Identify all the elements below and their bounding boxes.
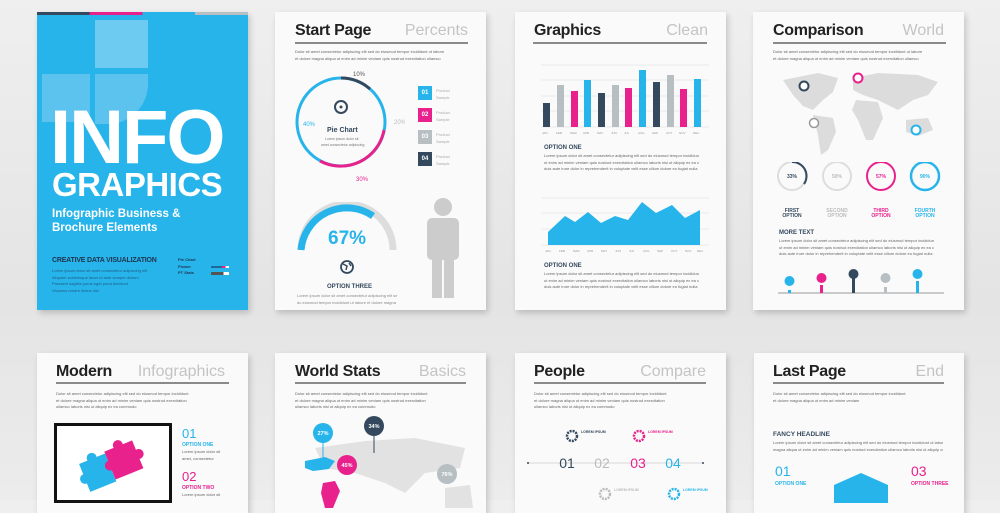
mini legend [178, 257, 196, 275]
legend: 04 [422, 156, 428, 162]
pie chart: 40% [303, 122, 316, 128]
option list: OPTION ONE [182, 442, 213, 448]
progress circles: 33% [787, 174, 798, 180]
panel: people: ullamco laboris nisi ut aliquip ex ea commodo [534, 404, 614, 409]
bar chart: DEC [693, 131, 700, 135]
option one text 2: OPTION ONE [544, 263, 582, 269]
progress circles: SECOND [826, 208, 848, 214]
panel: comparison: duis aute irure dolor in reprehenderit in voluptate velit esse cillum dolore eu fugiat nulla [779, 251, 932, 256]
progress circles: FIRST [785, 208, 799, 214]
progress circles: 90% [920, 174, 931, 180]
intro text: et dolore magna aliqua ut enim ad minim veniam quis nostrud exercitation ullamco [295, 56, 441, 60]
legend: Product [436, 154, 450, 159]
panel: comparison: et dolore magna aliqua ut enim ad minim veniam quis nostrud exercitation ullamco [773, 56, 919, 60]
legend: 03 [422, 134, 428, 140]
panel: comparison [753, 12, 964, 310]
map with bubbles: 45% [341, 463, 353, 469]
option list: Lorem ipsum dolor sit [182, 449, 220, 454]
option list: amet, consectetur [182, 456, 214, 460]
option list: Lorem ipsum dolor sit [182, 492, 220, 497]
panel: people: et dolore magna aliqua ut enim ad minim veniam quis nostrud exercitation [534, 398, 665, 402]
area chart: JUN [615, 249, 621, 253]
gauge 67% [298, 202, 396, 290]
option list: 01 [182, 426, 196, 441]
timeline: LOREM IPSUM [683, 488, 708, 492]
intro text [295, 49, 444, 61]
panel: start page: do eiusmod tempor incididunt ut labore et dolore magna [297, 300, 396, 304]
panel: start page: Percents [405, 22, 468, 39]
pie chart: Pie Chart [327, 127, 358, 134]
panel: world stats: Basics [419, 363, 466, 380]
panel: graphics: duis aute irure dolor in reprehenderit in voluptate velit esse cillum dolore eu fugiat nulla [544, 166, 697, 171]
area chart: JUL [629, 249, 635, 253]
3d shape [834, 473, 888, 503]
progress circles: OPTION [782, 213, 802, 219]
bar chart: MAR [570, 131, 578, 135]
mini legend: Pie Chart [178, 257, 196, 262]
legend: Sample [436, 160, 450, 166]
option 03 [911, 463, 949, 487]
timeline: 03 [630, 455, 646, 471]
progress circles: THIRD [873, 208, 889, 214]
fancy headline: FANCY HEADLINE [773, 431, 830, 438]
bar chart: NOV [679, 131, 686, 135]
panel: comparison: World [902, 22, 944, 39]
cover text [52, 268, 147, 292]
panel: world stats: ullamco laboris nisi ut aliquip ex ea commodo [295, 404, 375, 409]
pie chart: 10% [353, 72, 366, 78]
timeline: LOREM IPSUM [581, 430, 606, 434]
map with bubbles: 76% [441, 472, 453, 478]
legend: Sample [436, 94, 450, 100]
laptop with puzzle [54, 423, 172, 503]
panel: graphics [515, 12, 726, 310]
legend: Product [436, 88, 450, 93]
panel: modern [37, 353, 248, 513]
intro text: Dolor sit amet consectetur adipiscing elit sed do eiusmod tempor incididunt ut labore [295, 49, 444, 54]
panel: graphics: Graphics [534, 22, 601, 39]
bar chart: AUG [638, 131, 645, 135]
top color stripes [37, 12, 248, 15]
area chart: NOV [685, 249, 692, 253]
panel: world stats: World Stats [295, 363, 380, 380]
legend: Product [436, 132, 450, 137]
area chart: OCT [671, 249, 678, 253]
creative heading: CREATIVE DATA VISUALIZATION [52, 257, 157, 264]
area chart: MAR [573, 249, 580, 253]
bar chart: JUL [624, 131, 630, 135]
legend: 01 [422, 90, 428, 96]
timeline: 02 [594, 455, 610, 471]
progress circles [777, 162, 940, 219]
option list: 02 [182, 469, 196, 484]
option 01 [775, 463, 806, 487]
subtitle: Brochure Elements [52, 222, 157, 234]
timeline [527, 430, 708, 500]
subtitle [52, 208, 180, 234]
more text: MORE TEXT [779, 230, 814, 236]
panel: modern: Dolor sit amet consectetur adipiscing elit sed do eiusmod tempor incididunt [56, 391, 189, 396]
option list: OPTION TWO [182, 485, 214, 491]
panel: people [515, 353, 726, 513]
timeline: LOREM IPSUM [648, 430, 673, 434]
bar chart: JAN [542, 131, 548, 135]
mini legend: Flower [178, 264, 191, 268]
progress circles: FOURTH [915, 208, 936, 214]
panel: start page: Lorem ipsum dolor sit amet consectetur adipiscing elit sed [297, 293, 397, 298]
area chart: APR [587, 249, 594, 253]
bar chart: OCT [666, 131, 672, 135]
area chart: AUG [643, 249, 650, 253]
option 01: 01 [775, 463, 791, 479]
decorative squares [95, 20, 148, 68]
title GRAPHICS: GRAPHICS [52, 166, 222, 203]
legend: 02 [422, 112, 428, 118]
timeline: 01 [559, 455, 575, 471]
mini legend: PT Stats [178, 270, 194, 275]
map with bubbles: 34% [368, 424, 380, 430]
map with bubbles [305, 416, 473, 508]
panel: modern: Modern [56, 363, 112, 380]
panel: modern: Infographics [138, 363, 225, 380]
cover page [37, 12, 248, 310]
pie chart: amet consectetur adipiscing [321, 143, 364, 147]
cover text: Aliquam scelerisque lacus id ante semper dictum [52, 274, 139, 280]
area chart: DEC [697, 249, 704, 253]
map with bubbles: 27% [317, 431, 329, 437]
panel: comparison: Comparison [773, 22, 863, 39]
option 01: OPTION ONE [775, 481, 806, 487]
lollipop chart [778, 269, 944, 294]
panel: modern: ullamco laboris nisi ut aliquip ex ea commodo [56, 404, 136, 409]
progress circles: 50% [832, 174, 843, 180]
panel: people: People [534, 363, 585, 380]
panel: last page: Last Page [773, 363, 846, 380]
area chart: JAN [545, 249, 551, 253]
cover text: Lorem ipsum dolor sit amet consectetur adipiscing elit [52, 268, 147, 273]
option one text: OPTION ONE [544, 145, 582, 151]
icon: person [427, 198, 459, 298]
panel: people: Dolor sit amet consectetur adipiscing elit sed do eiusmod tempor incididunt [534, 391, 667, 396]
option 03: 03 [911, 463, 927, 479]
area chart [541, 198, 709, 253]
legend: Sample [436, 116, 450, 122]
timeline: 04 [665, 455, 681, 471]
progress circles: OPTION [915, 213, 935, 219]
world map with pins [783, 72, 938, 155]
panel: world stats: et dolore magna aliqua ut enim ad minim veniam quis nostrud exercitation [295, 398, 426, 402]
heading: Start Page [295, 22, 371, 39]
panel: last page: Dolor sit amet consectetur adipiscing elit sed do eiusmod tempor incididunt [773, 391, 906, 396]
title INFO: INFO [50, 95, 224, 180]
gauge 67%: 67% [328, 228, 366, 249]
legend: Product [436, 110, 450, 115]
panel: graphics: Clean [666, 22, 708, 39]
legend: Sample [436, 138, 450, 144]
area chart: MAY [601, 249, 607, 253]
bar chart [541, 64, 709, 135]
cover text: Praesent sagittis purus eget porta tincidunt [52, 281, 128, 286]
bar chart: FEB [556, 131, 562, 135]
progress circles: OPTION [827, 213, 847, 219]
legend [418, 86, 450, 166]
panel: last page [754, 353, 964, 513]
panel: people: Compare [640, 363, 706, 380]
pie chart: 30% [356, 177, 369, 183]
area chart: FEB [559, 249, 565, 253]
gauge 67%: OPTION THREE [327, 284, 372, 290]
progress circles: OPTION [871, 213, 891, 219]
option list [182, 426, 220, 497]
bar chart: SEP [652, 131, 658, 135]
bar chart: MAY [597, 131, 603, 135]
panel: start page [275, 12, 486, 310]
panel: modern: et dolore magna aliqua ut enim ad minim veniam quis nostrud exercitation [56, 398, 187, 402]
pie chart: Lorem ipsum dolor sit [325, 137, 358, 141]
pie chart [296, 72, 405, 183]
bar chart: APR [583, 131, 590, 135]
panel: comparison: Dolor sit amet consectetur adipiscing elit sed do eiusmod tempor incididunt ut labore [773, 49, 922, 54]
bar chart: JUN [611, 131, 617, 135]
option 03: OPTION THREE [911, 481, 949, 487]
area chart: SEP [657, 249, 663, 253]
panel: last page: et dolore magna aliqua ut enim ad minim veniam [773, 398, 859, 402]
panel: world stats: Dolor sit amet consectetur adipiscing elit sed do eiusmod tempor incididunt [295, 391, 428, 396]
progress circles: 57% [876, 174, 887, 180]
panel: graphics: duis aute irure dolor in reprehenderit in voluptate velit esse cillum dolore eu fugiat nulla [544, 284, 697, 289]
subtitle: Infographic Business & [52, 208, 180, 220]
cover text: Vivamus ornare lectus nisl [52, 288, 99, 292]
panel: world stats [275, 353, 486, 513]
timeline: LOREM IPSUM [614, 488, 639, 492]
panel: last page: End [916, 363, 944, 380]
